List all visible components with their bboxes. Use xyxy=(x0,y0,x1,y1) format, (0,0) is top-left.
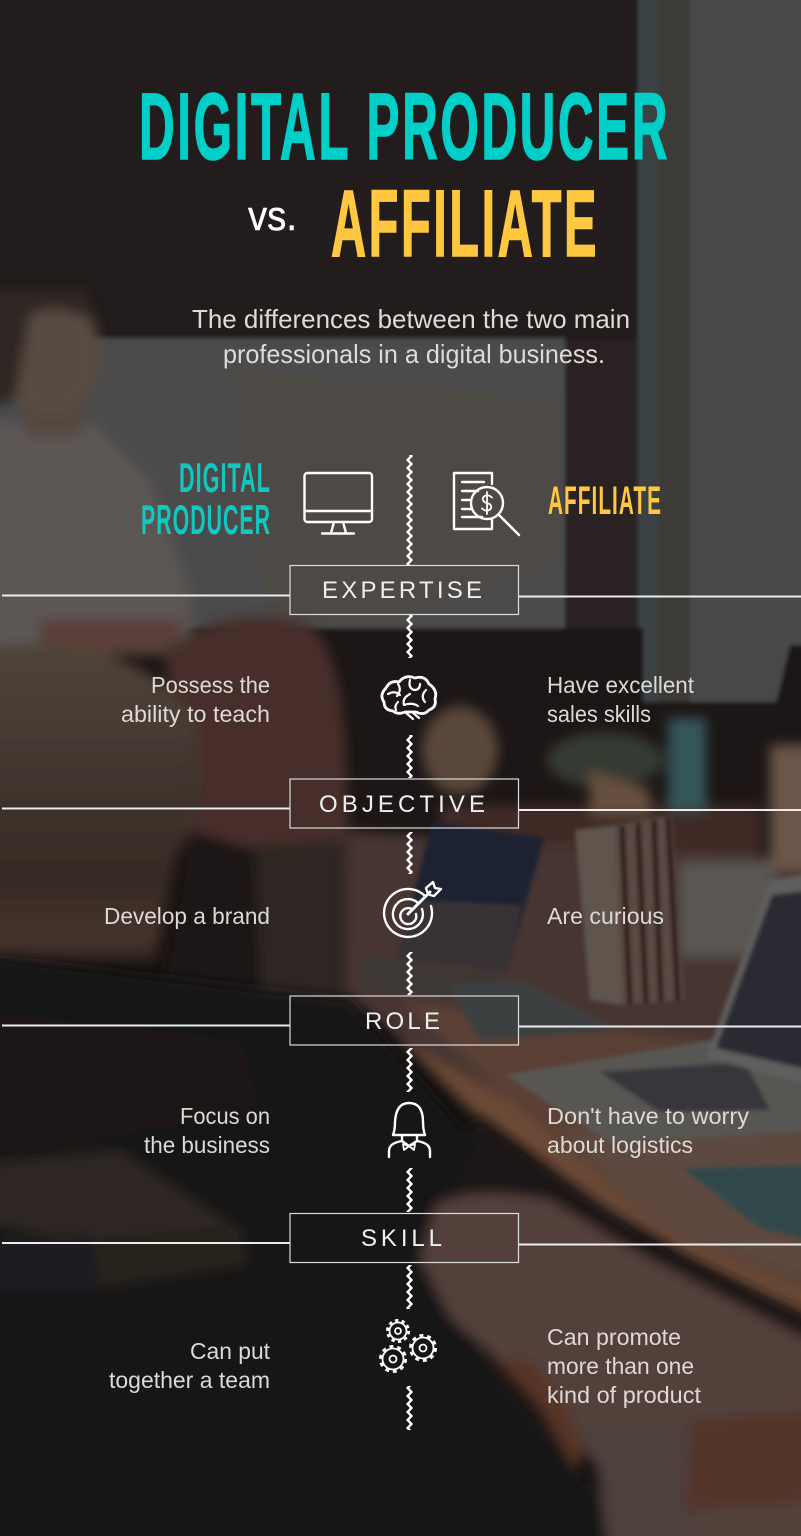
subtitle: The differences between the two main xyxy=(192,304,630,334)
table edge shadow xyxy=(430,1117,801,1360)
expertise: left text: ability to teach xyxy=(121,701,270,727)
woman hair xyxy=(165,617,350,880)
icon: target with dart xyxy=(384,882,441,937)
role: right text: Don't have to worry xyxy=(547,1103,750,1129)
role: left text: Focus on xyxy=(180,1103,270,1129)
skill: right text: kind of product xyxy=(547,1382,702,1408)
left laptop xyxy=(360,955,505,1000)
skill: right text: more than one xyxy=(547,1353,694,1379)
expertise: left text xyxy=(121,672,270,727)
band: role xyxy=(2,996,801,1045)
icon: businesswoman xyxy=(389,1103,430,1157)
right laptop xyxy=(505,1040,801,1142)
expertise: left text: Possess the xyxy=(151,672,270,698)
objective: left text: Develop a brand xyxy=(104,903,270,929)
right column heading: affiliate: AFFILIATE xyxy=(548,479,662,523)
left column heading: digital producer xyxy=(141,454,271,543)
subtitle: professionals in a digital business. xyxy=(223,339,605,369)
band: expertise: EXPERTISE xyxy=(322,577,482,604)
expertise: right text: Have excellent xyxy=(547,672,695,698)
objective: right text: Are curious xyxy=(547,903,664,929)
icon: brain xyxy=(382,677,436,719)
band: role: ROLE xyxy=(365,1008,440,1035)
left column heading: digital producer: DIGITAL xyxy=(179,454,271,501)
band: skill xyxy=(2,1214,801,1262)
skill: right text: Can promote xyxy=(547,1324,681,1350)
subtitle xyxy=(192,304,630,369)
band: objective xyxy=(2,779,801,828)
role: left text: the business xyxy=(144,1132,270,1158)
role: right text: about logistics xyxy=(547,1132,693,1158)
left column heading: digital producer: PRODUCER xyxy=(141,496,271,543)
band: skill: SKILL xyxy=(361,1225,442,1252)
expertise: right text xyxy=(547,672,695,727)
sleeve xyxy=(420,1194,801,1536)
center zigzag divider xyxy=(405,455,415,1430)
skill: left text xyxy=(109,1338,271,1393)
blond head xyxy=(0,645,200,965)
man xyxy=(0,420,192,650)
skill: right text xyxy=(547,1324,702,1408)
skill: left text: together a team xyxy=(109,1367,270,1393)
band: objective: OBJECTIVE xyxy=(319,791,485,818)
icon: gears xyxy=(380,1320,436,1372)
icon: desktop monitor xyxy=(304,473,372,534)
wall and window panels xyxy=(0,0,640,345)
skill: left text: Can put xyxy=(190,1338,271,1364)
title: vs.: vs. xyxy=(248,192,297,239)
expertise: right text: sales skills xyxy=(547,701,651,727)
icon: document with magnifier xyxy=(454,473,519,535)
striped bag xyxy=(575,825,622,1005)
table and desk items xyxy=(440,805,760,865)
role: right text xyxy=(547,1103,750,1158)
jacket and lower left xyxy=(0,955,610,1536)
teal paper xyxy=(683,1165,801,1245)
role: left text xyxy=(144,1103,270,1158)
band: expertise xyxy=(2,566,801,614)
whiteboard xyxy=(0,338,565,346)
